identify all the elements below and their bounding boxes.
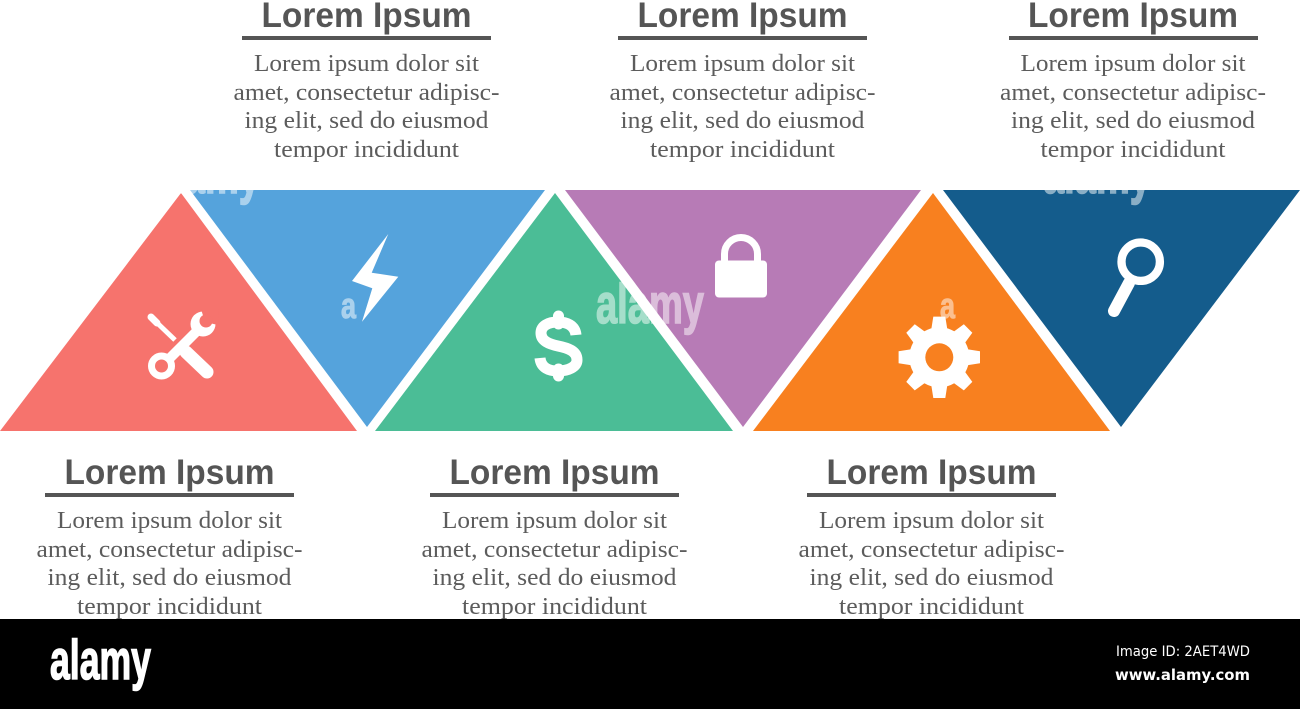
- text block: top 3: [1000, 0, 1266, 163]
- body text: ing elit, sed do eiusmod: [244, 108, 488, 134]
- body text: [798, 508, 1065, 620]
- body text: [422, 508, 688, 620]
- body text: tempor incididunt: [1040, 137, 1226, 163]
- body text: ing elit, sed do eiusmod: [1011, 108, 1255, 134]
- body text: tempor incididunt: [650, 137, 835, 163]
- body text: [36, 508, 303, 620]
- icon: wrench and screwdriver: [151, 309, 219, 376]
- heading rule: [45, 493, 294, 497]
- text block: top 2: [610, 0, 876, 163]
- watermark: small a on blue: a: [341, 285, 357, 326]
- body text: ing elit, sed do eiusmod: [620, 108, 864, 134]
- website: www.alamy.com: [1115, 666, 1250, 684]
- heading: Lorem Ipsum: [450, 453, 660, 492]
- icon: magnifying glass: [1114, 243, 1160, 311]
- triangle: purple: [565, 190, 921, 427]
- footer bar: [0, 619, 1300, 709]
- body text: amet, consectetur adipisc-: [234, 80, 500, 106]
- heading rule: [618, 36, 867, 40]
- heading rule: [430, 493, 679, 497]
- heading: Lorem Ipsum: [826, 453, 1036, 492]
- text block: bottom 2: [422, 453, 688, 620]
- text block: top 1: [234, 0, 500, 163]
- body text: tempor incididunt: [462, 594, 647, 620]
- icon: gear: [899, 317, 980, 398]
- body text: Lorem ipsum dolor sit: [1020, 51, 1246, 77]
- body text: amet, consectetur adipisc-: [798, 537, 1065, 563]
- body text: Lorem ipsum dolor sit: [819, 508, 1044, 534]
- watermark: small a on orange: a: [940, 285, 956, 326]
- body text: amet, consectetur adipisc-: [422, 537, 688, 563]
- image id: Image ID: 2AET4WD: [1116, 644, 1250, 660]
- heading rule: [242, 36, 491, 40]
- body text: [610, 51, 876, 163]
- icon: dollar sign: [540, 316, 577, 376]
- text block: bottom 3: [798, 453, 1065, 620]
- body text: Lorem ipsum dolor sit: [630, 51, 855, 77]
- body text: Lorem ipsum dolor sit: [254, 51, 479, 77]
- triangle: red: [0, 193, 357, 431]
- icon: lightning bolt: [352, 234, 398, 322]
- body text: Lorem ipsum dolor sit: [57, 508, 282, 534]
- body text: [234, 51, 500, 163]
- body text: amet, consectetur adipisc-: [36, 537, 303, 563]
- watermark: top alamy on navy: alamy: [1043, 142, 1151, 205]
- body text: tempor incididunt: [274, 137, 459, 163]
- icon: padlock: [715, 238, 767, 298]
- text block: bottom 1: [36, 453, 303, 620]
- body text: [1000, 51, 1266, 163]
- heading rule: [1009, 36, 1258, 40]
- body text: ing elit, sed do eiusmod: [810, 565, 1054, 591]
- heading rule: [807, 493, 1056, 497]
- body text: amet, consectetur adipisc-: [610, 80, 876, 106]
- body text: Lorem ipsum dolor sit: [442, 508, 667, 534]
- heading: Lorem Ipsum: [64, 453, 274, 492]
- body text: amet, consectetur adipisc-: [1000, 80, 1266, 106]
- triangle band: [0, 190, 1300, 431]
- watermark: centre alamy: alamy: [596, 272, 704, 335]
- triangle: navy: [943, 190, 1300, 427]
- body text: tempor incididunt: [839, 594, 1024, 620]
- body text: ing elit, sed do eiusmod: [432, 565, 676, 591]
- watermark: top alamy on blue: alamy: [152, 142, 260, 205]
- triangle: blue: [190, 190, 545, 427]
- body text: tempor incididunt: [77, 594, 262, 620]
- logo: alamy: alamy: [50, 628, 151, 691]
- triangle: orange: [753, 193, 1110, 431]
- triangle: green: [375, 193, 733, 431]
- body text: ing elit, sed do eiusmod: [48, 565, 292, 591]
